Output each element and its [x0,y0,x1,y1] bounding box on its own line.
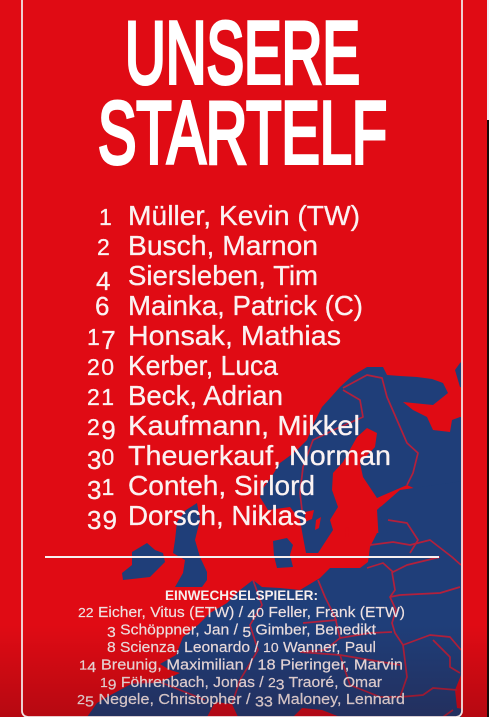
player 1: Müller, Kevin (TW) [128,200,360,231]
country borders [133,375,461,717]
substitutes list: Gimber, Benedikt [251,622,376,638]
player 6: 6 [95,291,109,321]
player 29: 9 [101,415,116,445]
substitutes list: Traoré, Omar [285,675,382,691]
substitutes list: Negele, Christopher / [94,692,255,708]
player 31: 1 [101,474,116,500]
substitutes list: 4 [87,660,96,676]
substitutes list: Breunig, Maximilian / [96,658,257,674]
player 4: Siersleben, Tim [128,260,318,291]
player 31: 3 [87,475,101,505]
player 4: 4 [96,266,110,296]
player 17: Honsak, Mathias [128,320,341,351]
substitutes list: Schöppner, Jan / [116,622,242,638]
substitutes list: 2 [77,692,85,707]
starting eleven list [87,200,391,535]
substitutes list: 2 [268,675,276,690]
player 29: Kaufmann, Mikkel [128,410,360,441]
title [98,3,387,182]
substitutes list: 8 Scienza, Leonardo / 10 Wanner, Paul [107,640,376,656]
continental Europe [87,480,470,717]
player 39: 39 [87,505,118,535]
player 30: 0 [101,444,116,470]
player 30: 3 [87,445,101,475]
player 20: 20 [87,354,116,380]
player 31: Conteh, Sirlord [128,470,315,501]
substitutes list: 5 [242,625,251,641]
player 6: Mainka, Patrick (C) [128,290,363,321]
player 20: Kerber, Luca [128,350,278,381]
substitutes list: 0 [256,605,264,620]
substitutes heading: EINWECHSELSPIELER: [165,588,318,603]
player 21: 21 [87,384,116,410]
divider [45,556,439,558]
player 29: 2 [87,414,101,440]
Great Britain [173,503,207,587]
substitutes list: 9 [108,678,117,694]
Ireland [122,543,165,580]
Swedish lakes and Gotland [305,510,321,530]
substitutes list: 3 [276,678,285,694]
substitutes list: Maloney, Lennard [273,692,405,708]
map of Europe [87,355,470,717]
substitutes list: Feller, Frank (ETW) [268,605,395,621]
substitutes list: Föhrenbach, Jonas / [117,675,268,691]
substitutes list: 1 [100,675,108,690]
substitutes list: 5 [85,694,94,710]
substitutes list: 3 [107,625,115,641]
Mediterranean and Black Sea patches [207,675,470,717]
Scandinavia, Finland and Russia [260,367,461,553]
player 1: 1 [99,204,113,230]
substitutes list [77,605,405,710]
substitutes list: 33 [255,694,273,710]
player 17: 7 [101,325,116,355]
player 21: Beck, Adrian [128,380,283,411]
bottom shading [0,625,487,717]
substitutes list: 1 [79,658,87,672]
substitutes list: 4 [247,608,256,624]
right edge strip [487,0,489,717]
player 30: Theuerkauf, Norman [128,440,391,471]
Denmark [273,538,293,568]
player 2: Busch, Marnon [128,230,318,261]
title: UNSERE [125,3,360,102]
substitutes list: 22 Eicher, Vitus (ETW) / [78,605,232,621]
player 39: Dorsch, Niklas [128,500,307,531]
Russian Arctic corner [455,362,461,388]
player 2: 2 [97,234,111,260]
substitutes list: 18 Pieringer, Marvin [257,658,386,674]
player 17: 1 [87,324,101,350]
